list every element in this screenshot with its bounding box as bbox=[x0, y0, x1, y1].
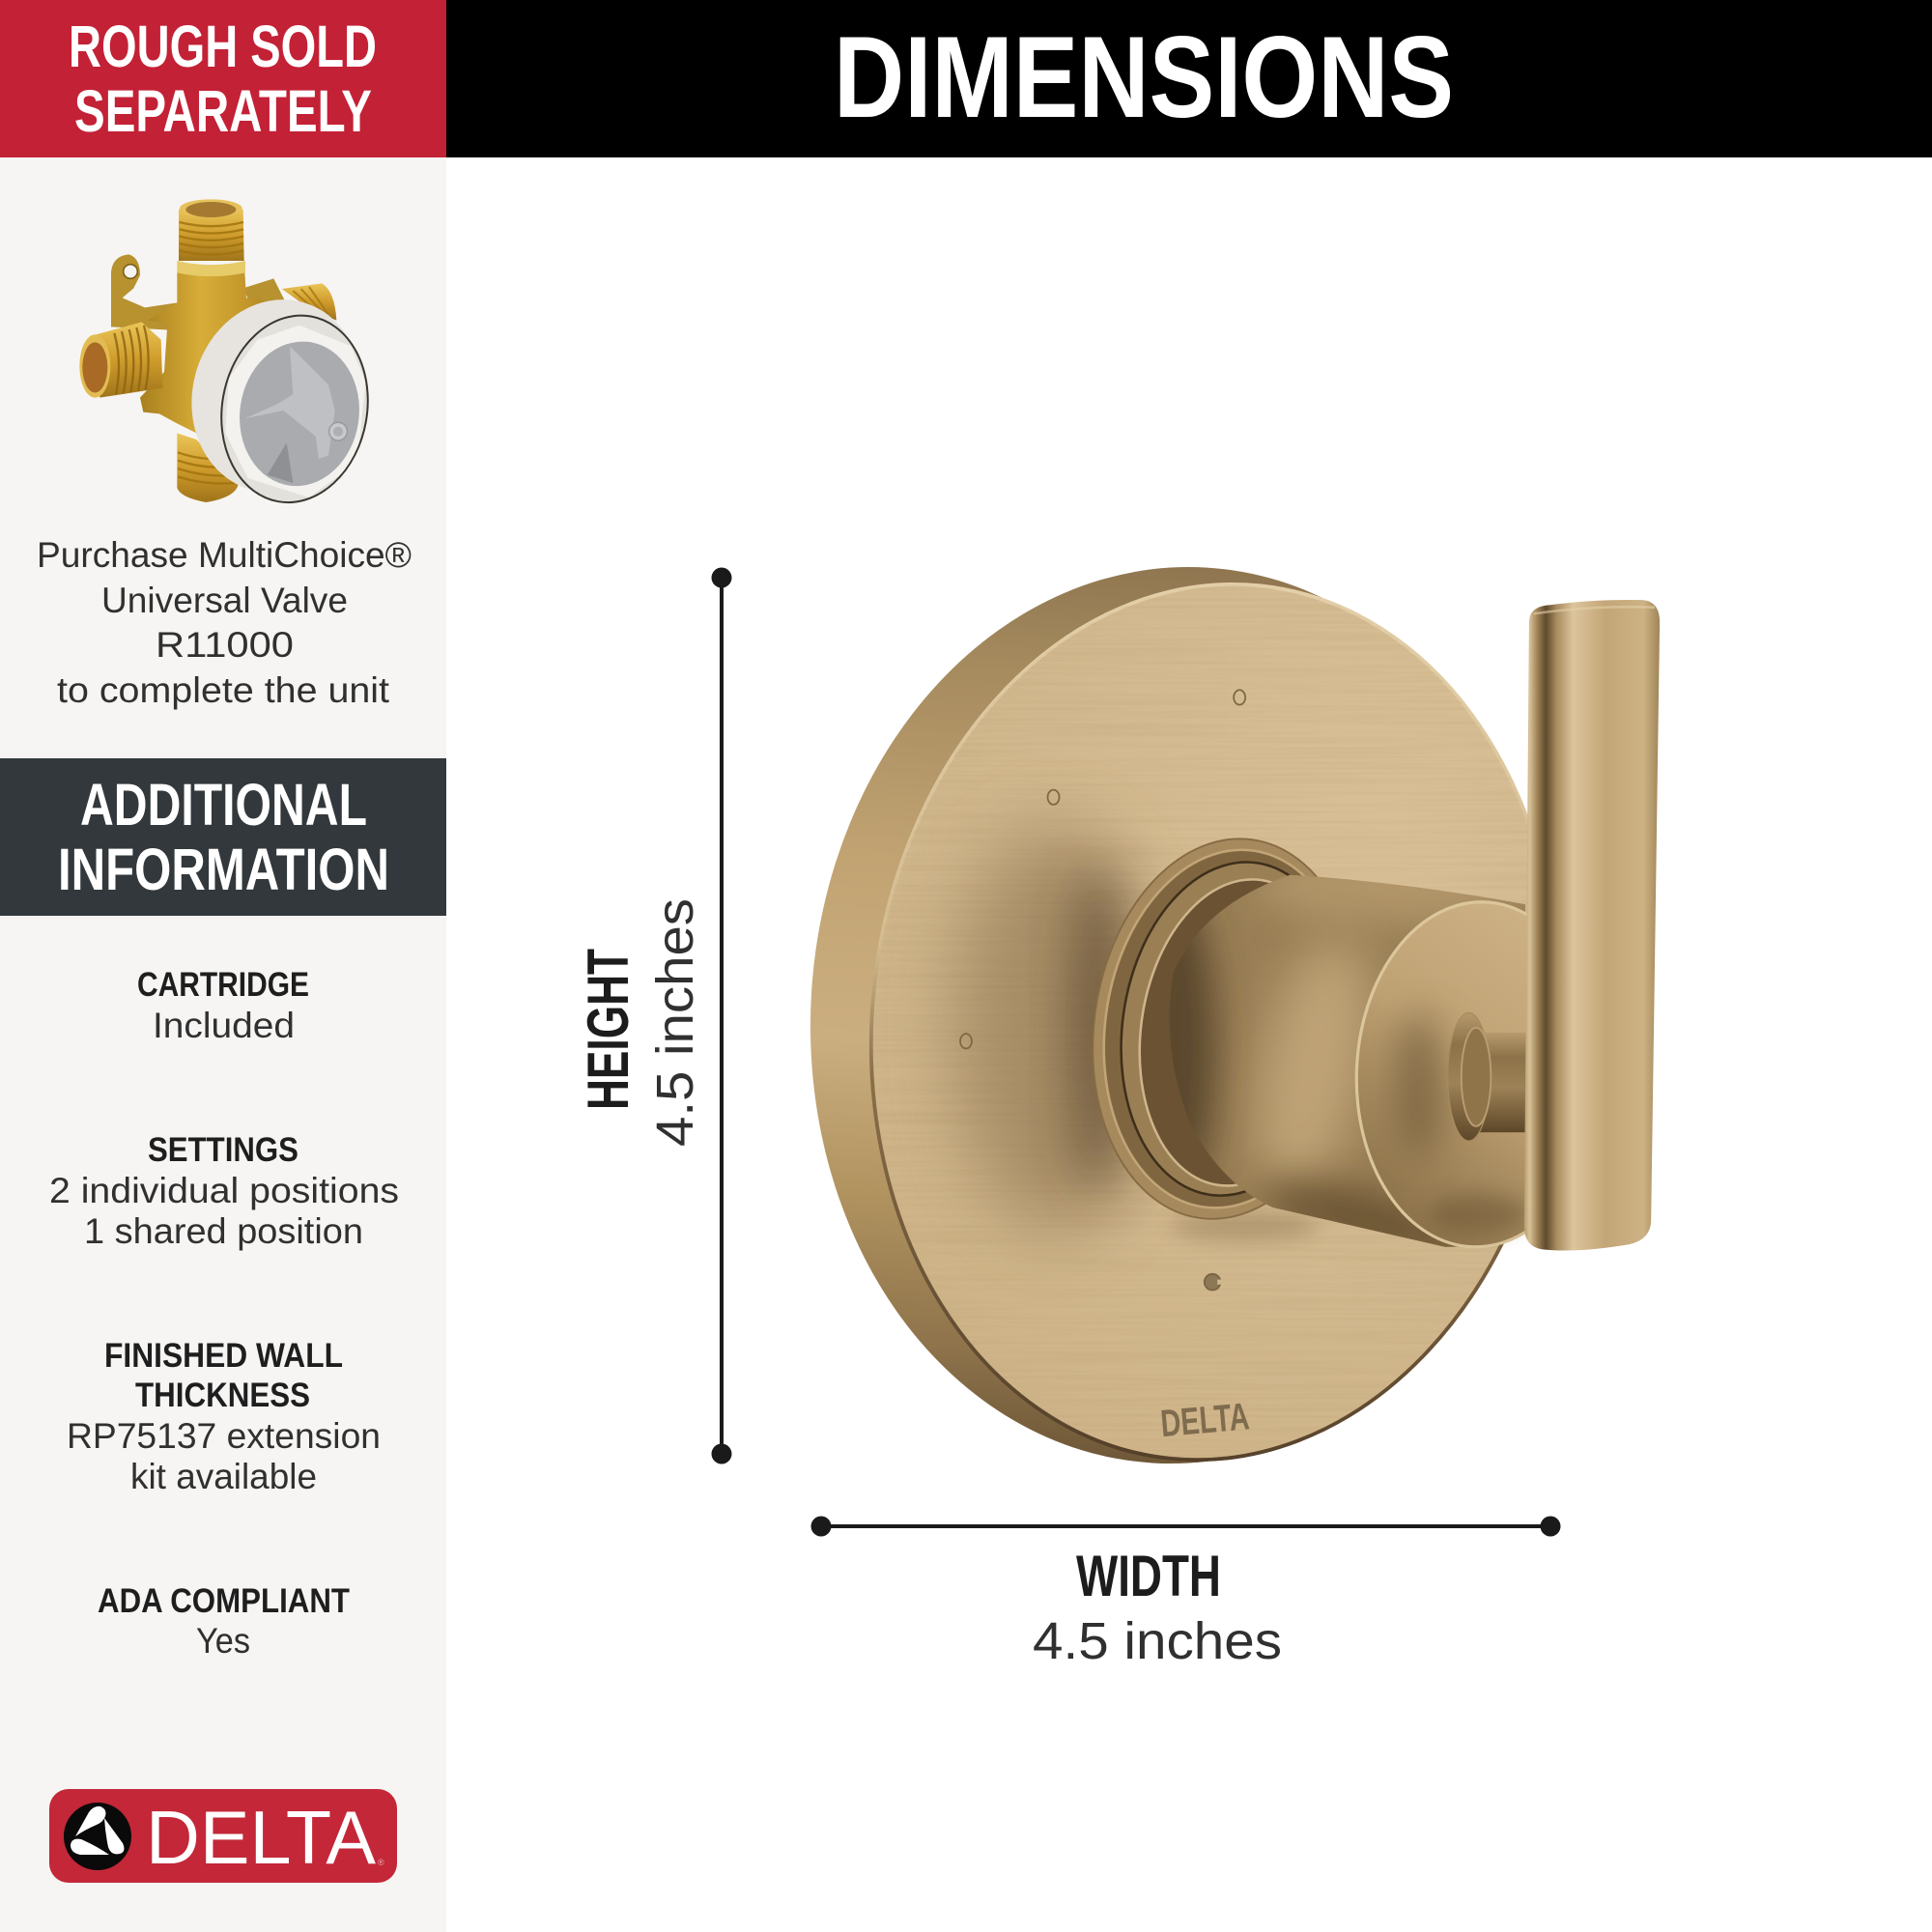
banner: additional information: ADDITIONAL bbox=[80, 772, 367, 838]
product: gold trim plate and lever handle bbox=[784, 545, 1660, 1494]
top nipple bbox=[179, 210, 244, 261]
width label bbox=[1033, 1544, 1282, 1670]
spec: ada compliant: ADA COMPLIANT bbox=[98, 1582, 350, 1620]
red banner: rough sold separately bbox=[0, 0, 446, 157]
red banner: rough sold separately: SEPARATELY bbox=[74, 78, 372, 144]
left nipple bbox=[95, 322, 162, 398]
spec: settings: 2 individual positions bbox=[49, 1171, 399, 1210]
spec: cartridge: Included bbox=[153, 1006, 295, 1045]
certification mark bbox=[1205, 1274, 1224, 1290]
height label bbox=[576, 898, 704, 1147]
sidebar panel bbox=[0, 0, 446, 1932]
text: purchase note bbox=[37, 535, 412, 710]
spec: finished wall thickness: RP75137 extension bbox=[67, 1416, 381, 1456]
grey interior bbox=[230, 333, 369, 494]
banner: additional information bbox=[0, 758, 446, 916]
icon: brass rough-in valve bbox=[79, 199, 384, 514]
spec: finished wall thickness: kit available bbox=[130, 1457, 317, 1496]
height dimension line bbox=[711, 568, 732, 1464]
spec: settings bbox=[49, 1131, 399, 1251]
text: purchase note: R11000 bbox=[156, 625, 294, 665]
title: DIMENSIONS bbox=[834, 13, 1454, 142]
text: purchase note: Universal Valve bbox=[101, 581, 348, 620]
right nipple bbox=[282, 283, 336, 321]
spec: finished wall thickness bbox=[67, 1337, 381, 1496]
spec: cartridge bbox=[137, 966, 309, 1045]
header bar: dimensions bbox=[446, 0, 1932, 157]
mounting ear bbox=[111, 254, 177, 330]
knob end cap bbox=[1354, 900, 1526, 1248]
bottom nipple bbox=[177, 433, 239, 502]
width label: WIDTH bbox=[1076, 1544, 1221, 1608]
plate logotype: DELTA bbox=[1159, 1395, 1251, 1445]
valve body bbox=[140, 272, 293, 433]
spec: ada compliant: Yes bbox=[196, 1621, 250, 1661]
collar bbox=[1448, 1012, 1491, 1141]
lug bbox=[243, 278, 285, 327]
height label: HEIGHT bbox=[576, 949, 640, 1110]
width dimension line bbox=[811, 1517, 1561, 1536]
logo: delta: ® bbox=[378, 1858, 384, 1867]
spec: finished wall thickness: FINISHED WALL bbox=[104, 1337, 343, 1375]
flange rings bbox=[1068, 821, 1383, 1236]
height label: 4.5 inches bbox=[646, 898, 704, 1147]
logo: delta: DELTA bbox=[146, 1795, 376, 1880]
text: purchase note: Purchase MultiChoice® bbox=[37, 535, 412, 575]
knob cylinder bbox=[1169, 875, 1525, 1247]
banner: additional information: INFORMATION bbox=[58, 837, 389, 902]
face plate bbox=[829, 550, 1602, 1494]
lever handle bbox=[1524, 600, 1660, 1251]
spec: cartridge: CARTRIDGE bbox=[137, 966, 309, 1004]
spec: settings: 1 shared position bbox=[84, 1211, 363, 1251]
red banner: rough sold separately: ROUGH SOLD bbox=[69, 14, 377, 79]
set holes bbox=[960, 690, 1245, 1048]
chrome nut bbox=[207, 303, 383, 514]
stem bbox=[1466, 1033, 1528, 1132]
spec: ada compliant bbox=[98, 1582, 350, 1661]
text: purchase note: to complete the unit bbox=[57, 670, 390, 710]
logo: delta bbox=[49, 1789, 397, 1883]
width label: 4.5 inches bbox=[1033, 1612, 1282, 1670]
white ring bbox=[170, 280, 384, 512]
spec: settings: SETTINGS bbox=[148, 1131, 298, 1169]
spec: finished wall thickness: THICKNESS bbox=[135, 1377, 310, 1414]
rim bbox=[784, 545, 1576, 1486]
